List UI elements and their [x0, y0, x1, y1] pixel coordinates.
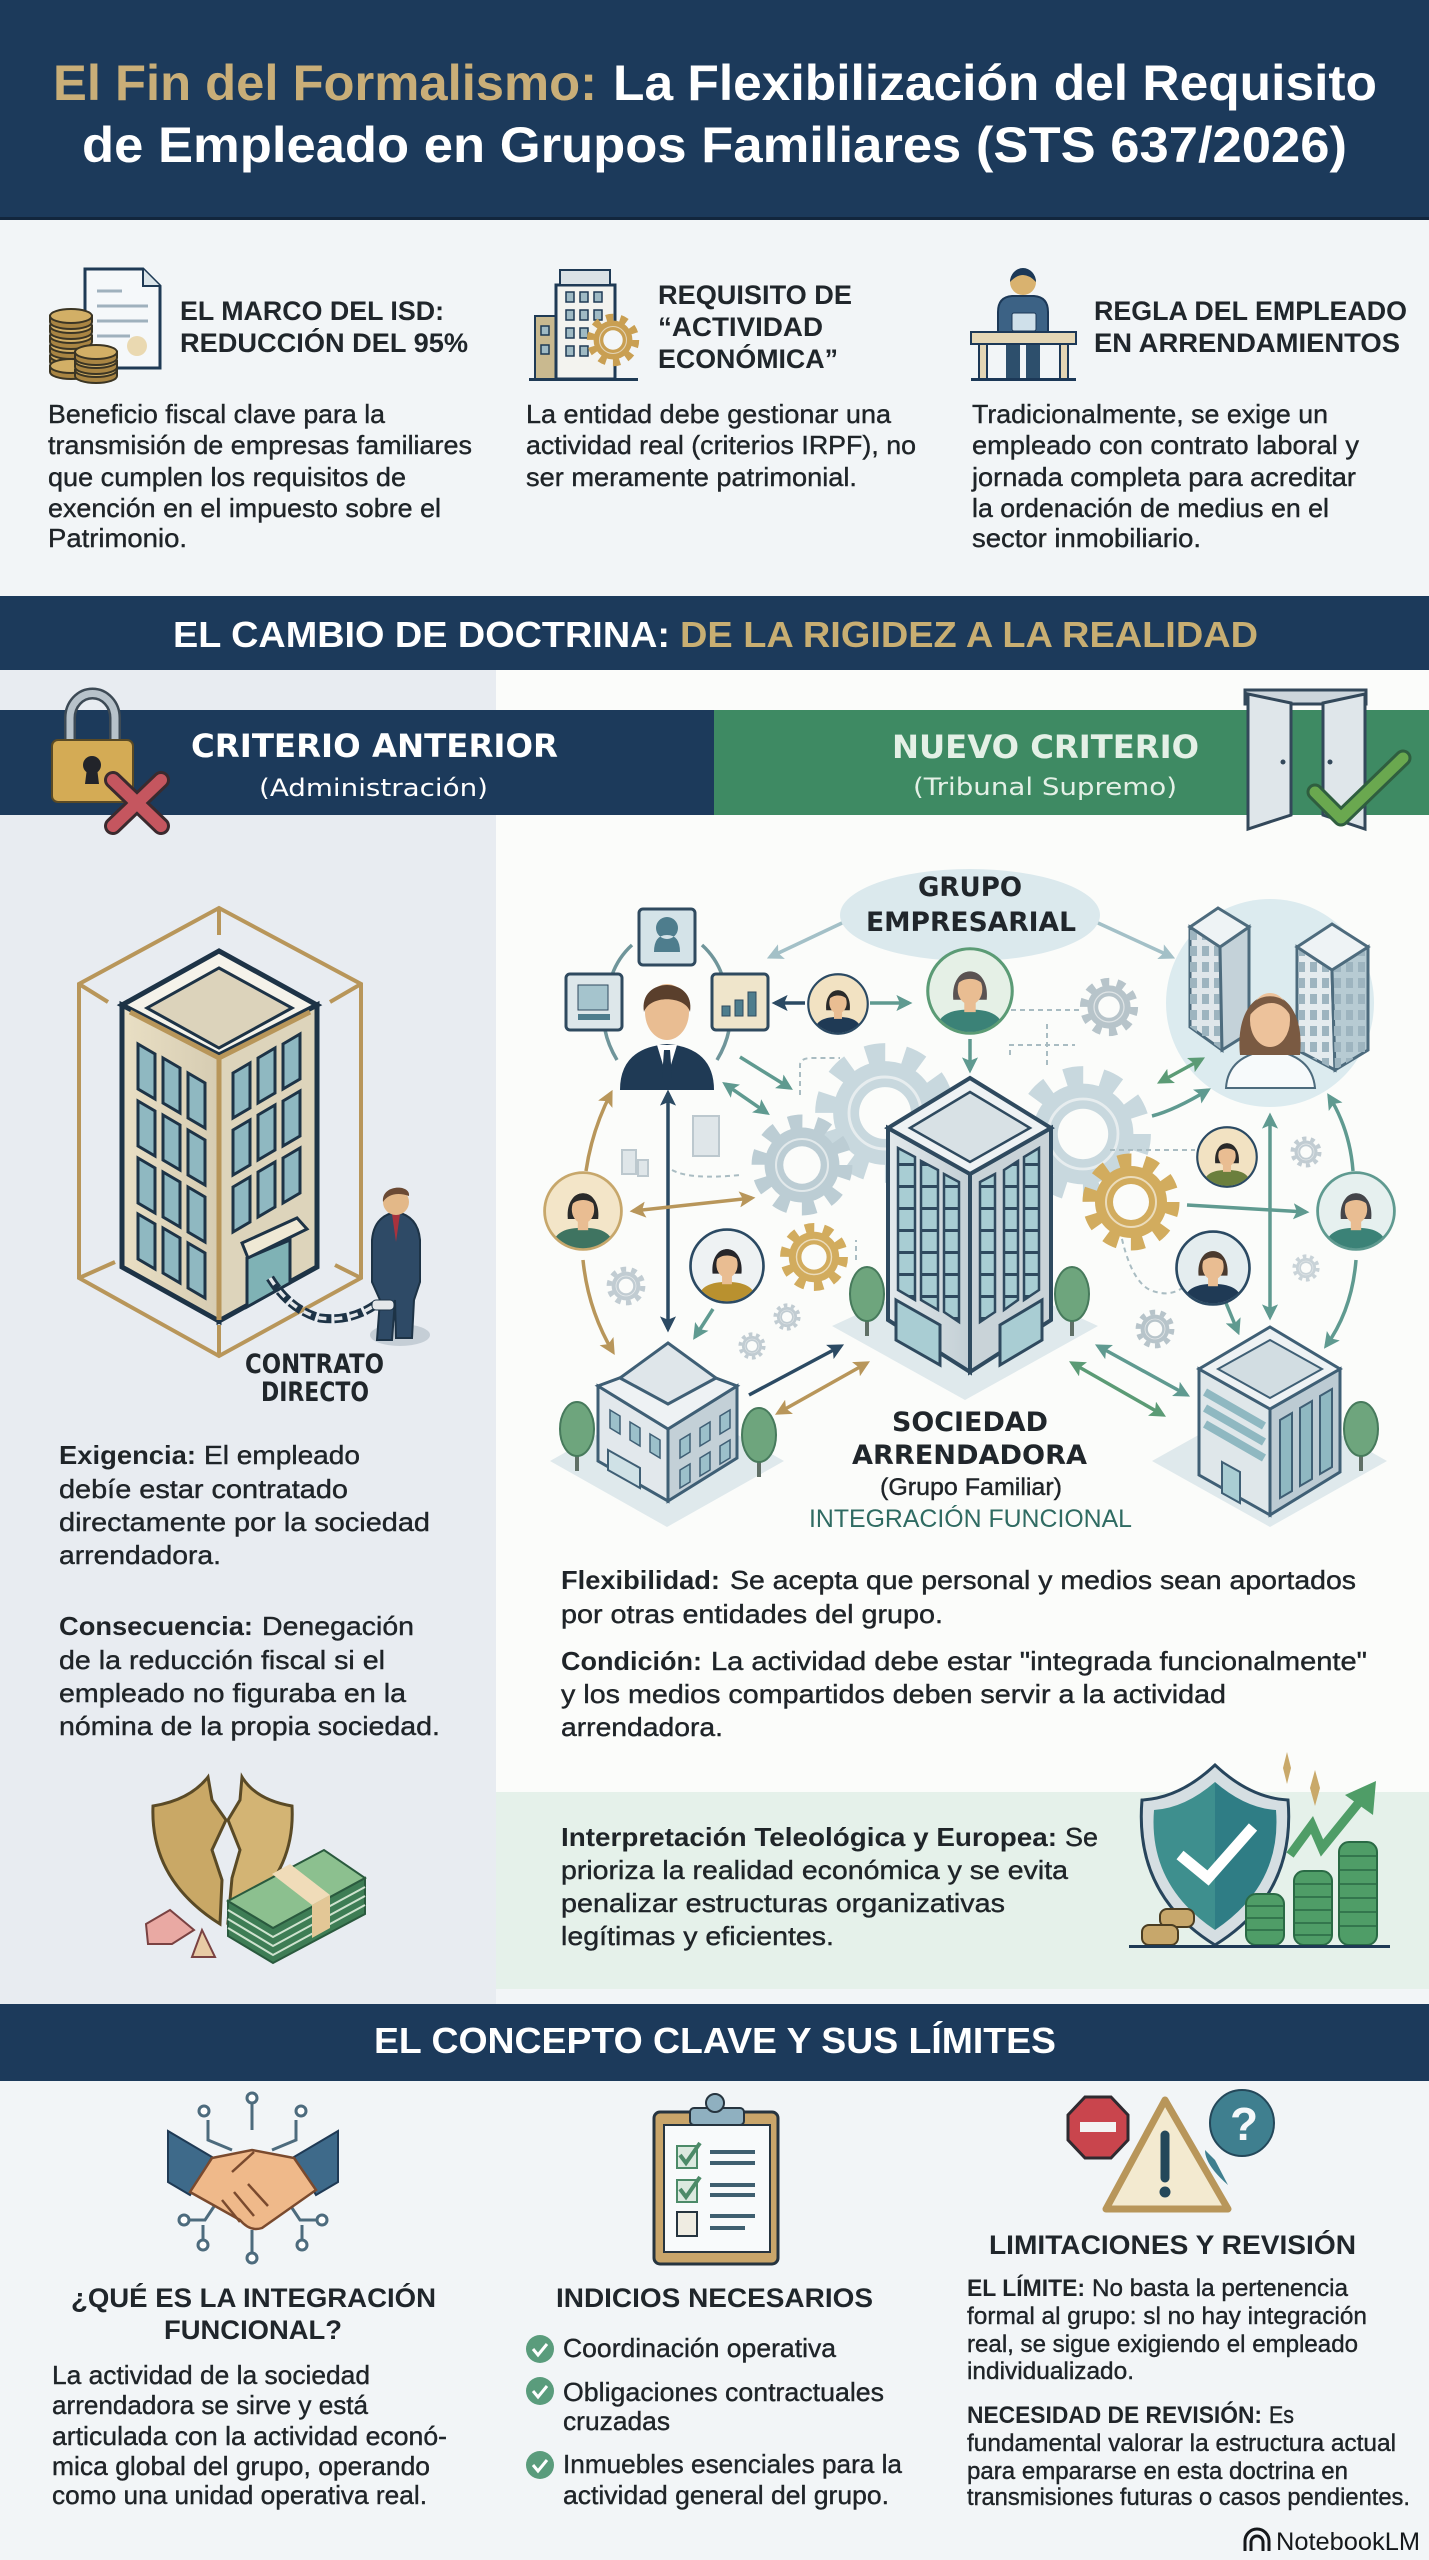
- text block: consecuencia: Consecuencia:: [59, 1611, 253, 1641]
- text block: exigencia: El empleado: [204, 1440, 360, 1470]
- text block: consecuencia: nómina de la propia sociedad.: [59, 1711, 440, 1741]
- faint buildings: [622, 1116, 719, 1176]
- text block: integración: [52, 2360, 447, 2510]
- panel: right background: [496, 670, 1429, 1792]
- text block: regla: [971, 399, 1359, 553]
- gears behind: [609, 982, 1319, 1358]
- header banner: El Fin del Formalismo:: [53, 55, 597, 111]
- text block: actividad: ser meramente patrimonial.: [526, 462, 857, 492]
- text block: integración: mica global del grupo, operando: [52, 2451, 430, 2481]
- text block: exigencia: debíe estar contratado: [59, 1474, 348, 1504]
- illustration: building bound to employee: [79, 908, 430, 1356]
- main building: sociedad arrendadora: [832, 1078, 1098, 1400]
- heading: actividad: “ACTIVIDAD: [658, 312, 823, 342]
- text block: condicion: arrendadora.: [561, 1712, 723, 1742]
- icon: clipboard: [654, 2094, 778, 2264]
- text block: consecuencia: Denegación: [262, 1611, 414, 1641]
- text block: flexibilidad: Se acepta que personal y medios sean aportados: [730, 1565, 1356, 1595]
- icon: employee at desk: [971, 268, 1076, 381]
- text block: el límite: formal al grupo: sl no hay integración: [967, 2303, 1367, 2330]
- header: criterio anterior: [0, 710, 714, 815]
- list: indicios: actividad general del grupo.: [563, 2480, 889, 2510]
- text block: integración: arrendadora se sirve y está: [52, 2390, 369, 2420]
- text block: el límite: individualizado.: [967, 2358, 1134, 2385]
- list: indicios: [526, 2333, 903, 2510]
- header: nuevo criterio: [714, 710, 1429, 815]
- icon: padlock with red cross: [52, 693, 161, 826]
- label: sociedad arrendadora: [809, 1407, 1132, 1533]
- text block: exigencia: directamente por la sociedad: [59, 1507, 430, 1537]
- panel: actividad económica: [526, 270, 916, 492]
- icon: document and coins: [50, 269, 160, 383]
- building: bottom left: [550, 1343, 784, 1527]
- header banner: La Flexibilización del Requisito: [613, 55, 1377, 111]
- background circle top right: [1166, 899, 1374, 1107]
- heading: integración: ¿QUÉ ES LA INTEGRACIÓN: [71, 2282, 436, 2313]
- label: sociedad arrendadora: ARRENDADORA: [852, 1440, 1087, 1471]
- arcs around executive group: [605, 945, 729, 1060]
- ellipse: grupo empresarial: [840, 869, 1100, 961]
- text block: necesidad de revisión: fundamental valorar la estructura actual: [967, 2430, 1396, 2457]
- diagram: grupo empresarial network: [545, 869, 1394, 1527]
- text block: consecuencia: empleado no figuraba en la: [59, 1678, 407, 1708]
- text block: el límite: No basta la pertenencia: [1092, 2275, 1349, 2302]
- text block: marco: exención en el impuesto sobre el: [48, 493, 441, 523]
- icon: open door with check: [1245, 690, 1403, 829]
- text block: consecuencia: de la reducción fiscal si el: [59, 1645, 385, 1675]
- icon: shield with growth: [1129, 1752, 1390, 1948]
- text block: interpretación: Se: [1065, 1822, 1098, 1852]
- label: sociedad arrendadora: (Grupo Familiar): [880, 1474, 1062, 1501]
- arrows: network links: [583, 923, 1356, 1415]
- text block: marco: Patrimonio.: [48, 523, 187, 553]
- text block: regla: la ordenación de medius en el: [972, 493, 1329, 523]
- text block: exigencia: Exigencia:: [59, 1440, 196, 1470]
- text block: el límite: EL LÍMITE:: [967, 2274, 1085, 2302]
- text block: necesidad de revisión: transmisiones futuras o casos pendientes.: [967, 2484, 1410, 2511]
- label: contrato directo: [245, 1349, 384, 1408]
- text block: condicion: La actividad debe estar "integrada funcionalmente": [711, 1646, 1367, 1676]
- text block: marco: Beneficio fiscal clave para la: [48, 399, 386, 429]
- text block: actividad: actividad real (criterios IRPF), no: [526, 430, 916, 460]
- heading: integración: FUNCIONAL?: [164, 2315, 342, 2345]
- text block: interpretación: prioriza la realidad económica y se evita: [561, 1855, 1069, 1885]
- icon: warning signs: [1068, 2090, 1274, 2209]
- text block: necesidad de revisión: [967, 2401, 1410, 2511]
- list: indicios: Inmuebles esenciales para la: [563, 2449, 903, 2479]
- text block: necesidad de revisión: Es: [1269, 2402, 1294, 2429]
- ellipse: grupo empresarial: EMPRESARIAL: [866, 907, 1076, 938]
- header: criterio anterior: (Administración): [259, 774, 488, 802]
- dashed connectors: [672, 1010, 1195, 1293]
- section banner: cambio de doctrina: DE LA RIGIDEZ A LA REALIDAD: [680, 614, 1258, 655]
- panel: interpretación teleológica: [496, 1792, 1429, 1989]
- icon: building with gear: [529, 270, 638, 381]
- logo: NotebookLM: NotebookLM: [1276, 2528, 1420, 2556]
- heading: regla: REGLA DEL EMPLEADO: [1094, 296, 1407, 326]
- text block: necesidad de revisión: NECESIDAD DE REVISIÓN:: [967, 2401, 1262, 2429]
- text block: consecuencia: [59, 1611, 440, 1741]
- heading: marco: REDUCCIÓN DEL 95%: [180, 327, 468, 358]
- text block: marco: que cumplen los requisitos de: [48, 462, 406, 492]
- text block: interpretación: Interpretación Teleológica y Europea:: [561, 1822, 1057, 1852]
- header: nuevo criterio: NUEVO CRITERIO: [892, 728, 1199, 766]
- panel: marco del ISD: [48, 269, 472, 553]
- panel: left background: [0, 670, 496, 2004]
- label: contrato directo: CONTRATO: [245, 1349, 384, 1380]
- text block: regla: jornada completa para acreditar: [971, 462, 1356, 492]
- text block: regla: empleado con contrato laboral y: [972, 430, 1359, 460]
- panel: indicios necesarios: [526, 2094, 903, 2510]
- list: indicios: Obligaciones contractuales: [563, 2377, 884, 2407]
- text block: flexibilidad: Flexibilidad:: [561, 1565, 720, 1595]
- icon: warning signs: ?: [1230, 2098, 1258, 2150]
- header banner: [0, 0, 1429, 220]
- towers and woman top right: [1190, 908, 1368, 1088]
- heading: marco: [180, 296, 468, 358]
- heading: marco: EL MARCO DEL ISD:: [180, 296, 444, 326]
- text block: flexibilidad: por otras entidades del grupo.: [561, 1599, 943, 1629]
- text block: actividad: [526, 399, 916, 492]
- panel: limitaciones y revisión: [967, 2090, 1410, 2511]
- heading: regla: EN ARRENDAMIENTOS: [1094, 328, 1400, 358]
- header banner: de Empleado en Grupos Familiares (STS 637/2026): [82, 117, 1347, 173]
- heading: regla: [1094, 296, 1407, 358]
- text block: marco: [48, 399, 472, 553]
- text block: integración: La actividad de la sociedad: [52, 2360, 370, 2390]
- building: bottom right: [1152, 1327, 1387, 1527]
- text block: marco: transmisión de empresas familiares: [48, 430, 472, 460]
- icon: broken shield and money: [146, 1777, 365, 1963]
- heading: actividad: [658, 280, 852, 374]
- text block: exigencia: arrendadora.: [59, 1540, 221, 1570]
- header: nuevo criterio: (Tribunal Supremo): [913, 773, 1177, 801]
- text block: interpretación: [561, 1822, 1098, 1951]
- label: sociedad arrendadora: INTEGRACIÓN FUNCIONAL: [809, 1504, 1132, 1533]
- section banner: concepto clave: [0, 2004, 1429, 2081]
- people: network members: [545, 949, 1394, 1306]
- section banner: cambio de doctrina: EL CAMBIO DE DOCTRINA:: [173, 614, 670, 655]
- section banner: concepto clave: EL CONCEPTO CLAVE Y SUS LÍMITES: [374, 2020, 1056, 2061]
- text block: condicion: [561, 1646, 1367, 1742]
- text block: integración: articulada con la actividad econó-: [52, 2421, 447, 2451]
- text block: el límite: [967, 2274, 1367, 2385]
- text block: integración: como una unidad operativa real.: [52, 2480, 427, 2510]
- icon: handshake: [168, 2093, 338, 2263]
- panel: regla del empleado: [971, 268, 1407, 553]
- text block: flexibilidad: [561, 1565, 1356, 1629]
- heading: indicios: INDICIOS NECESARIOS: [556, 2283, 873, 2313]
- list: indicios: Coordinación operativa: [563, 2333, 837, 2363]
- ellipse: grupo empresarial: GRUPO: [918, 872, 1022, 903]
- header: criterio anterior: CRITERIO ANTERIOR: [191, 727, 558, 765]
- list: indicios: cruzadas: [563, 2406, 670, 2436]
- label: sociedad arrendadora: SOCIEDAD: [892, 1407, 1048, 1438]
- heading: actividad: ECONÓMICA”: [658, 343, 838, 374]
- text block: condicion: Condición:: [561, 1646, 702, 1676]
- text block: regla: sector inmobiliario.: [972, 523, 1201, 553]
- text block: interpretación: legítimas y eficientes.: [561, 1921, 834, 1951]
- heading: integración: [71, 2282, 436, 2345]
- text block: regla: Tradicionalmente, se exige un: [972, 399, 1328, 429]
- section banner: cambio de doctrina: [0, 596, 1429, 670]
- text block: necesidad de revisión: para empararse en esta doctrina en: [967, 2458, 1348, 2485]
- label: contrato directo: DIRECTO: [261, 1377, 369, 1408]
- heading: limitaciones: LIMITACIONES Y REVISIÓN: [989, 2229, 1356, 2260]
- text block: condicion: y los medios compartidos deben servir a la actividad: [561, 1679, 1226, 1709]
- people group top left: [566, 909, 768, 1090]
- text block: el límite: real, se sigue exigiendo el empleado: [967, 2331, 1358, 2358]
- heading: actividad: REQUISITO DE: [658, 280, 852, 310]
- text block: interpretación: penalizar estructuras organizativas: [561, 1888, 1005, 1918]
- text block: actividad: La entidad debe gestionar una: [526, 399, 892, 429]
- text block: exigencia: [59, 1440, 430, 1570]
- gold gears: [785, 1160, 1173, 1286]
- panel: integración funcional: [52, 2093, 447, 2510]
